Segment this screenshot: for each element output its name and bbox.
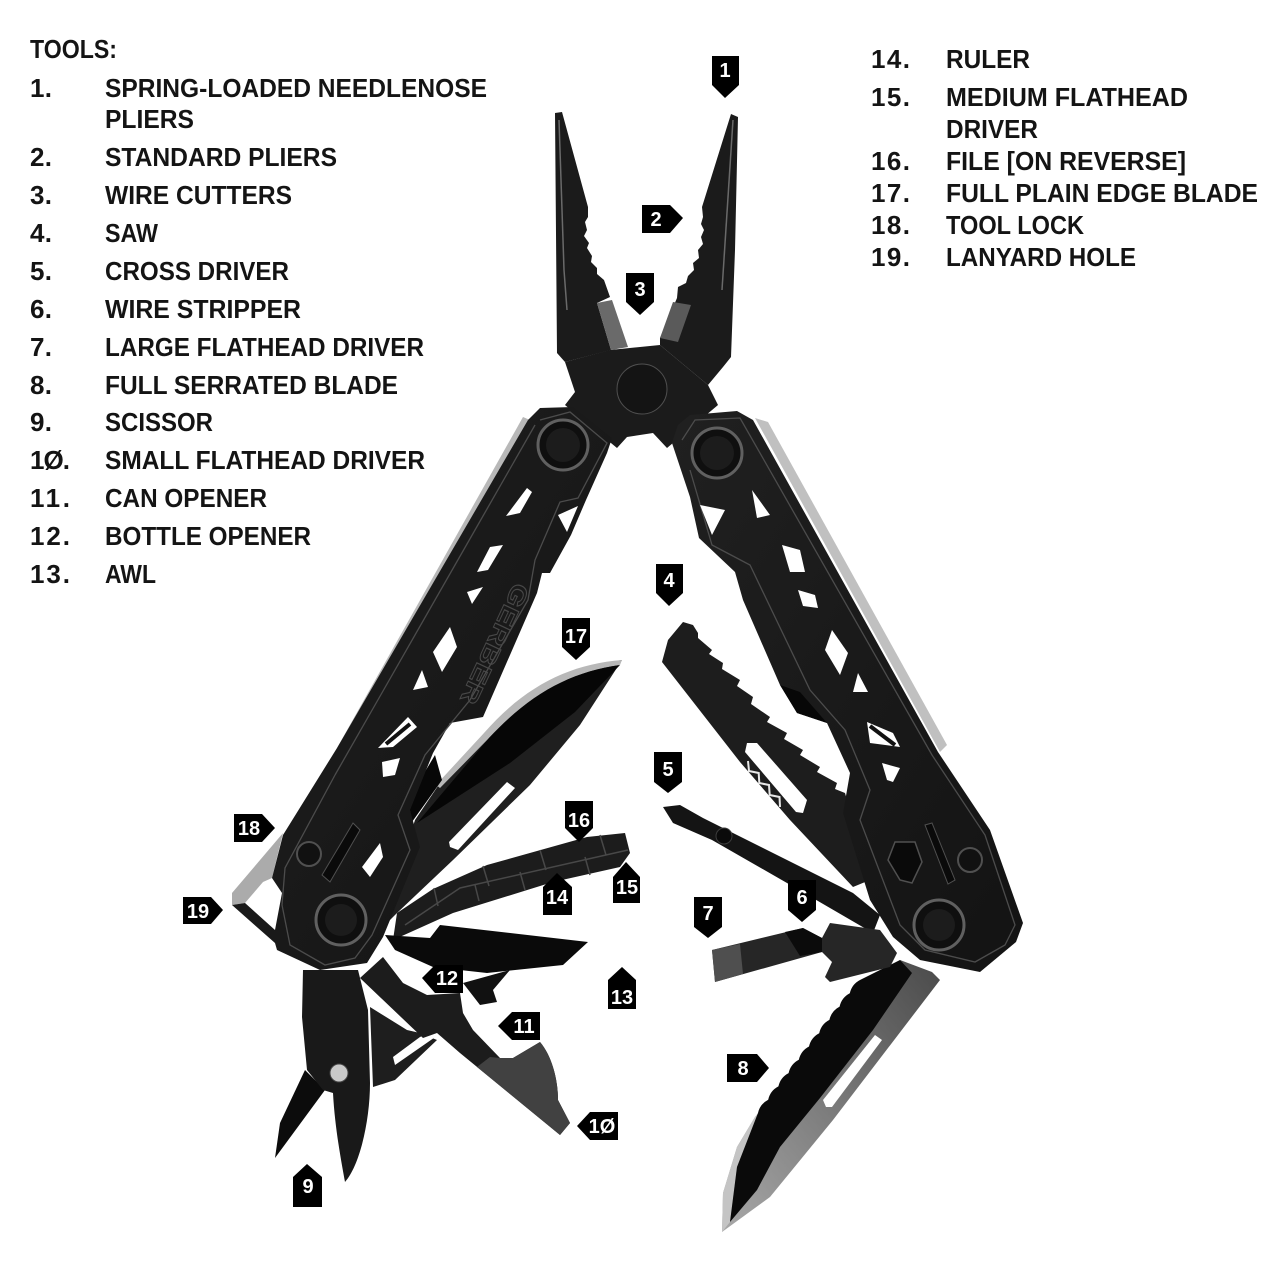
tools list, left column: 3. [30, 180, 52, 210]
right handle [672, 411, 1023, 972]
tools list, right column: 17. [871, 178, 910, 208]
tools list, left column: 13. [30, 559, 70, 589]
tag 5 [654, 752, 682, 793]
tool: full plain edge blade [380, 660, 622, 930]
tools list, right column: 15. [871, 82, 910, 112]
tools list, left column: SPRING-LOADED NEEDLENOSE [105, 73, 487, 103]
tool: full serrated blade [722, 960, 940, 1232]
tools list, right column: LANYARD HOLE [946, 242, 1136, 272]
tools list, left column: 9. [30, 407, 52, 437]
tag 14 [543, 873, 572, 915]
tag 15: 15 [616, 877, 638, 899]
tools list, right column: FILE [ON REVERSE] [946, 146, 1186, 176]
screw: upper pivot [692, 428, 742, 478]
tag 7: 7 [702, 903, 714, 925]
tag 17 [562, 618, 590, 660]
tag 11: 11 [513, 1016, 535, 1038]
tool: large flathead driver and wire stripper [712, 923, 897, 982]
hex recess [888, 842, 922, 883]
window cut-outs [362, 488, 578, 877]
tool: can opener and flathead drivers [360, 957, 570, 1135]
tag 1: 1 [719, 60, 731, 82]
tools list, left column: STANDARD PLIERS [105, 142, 337, 172]
tag 14: 14 [546, 887, 569, 909]
list heading: TOOLS: [30, 34, 117, 64]
tools list, left column: 8. [30, 370, 52, 400]
tools list, left column: CAN OPENER [105, 483, 267, 513]
tools list, left column: PLIERS [105, 104, 194, 134]
tag 10 [577, 1112, 618, 1140]
tag 9 [293, 1164, 322, 1207]
tag 12: 12 [436, 968, 458, 990]
tools list, right column: RULER [946, 44, 1030, 74]
tools list, left column: SMALL FLATHEAD DRIVER [105, 445, 425, 475]
tools list, left column: SCISSOR [105, 407, 213, 437]
tag 8: 8 [737, 1058, 749, 1080]
tag 7 [694, 897, 722, 938]
tools list, left column: 1Ø. [30, 445, 70, 475]
tag 13 [608, 967, 636, 1009]
multi-tool illustration [232, 112, 1023, 1232]
tag 15 [613, 862, 640, 903]
tools list, left column: WIRE STRIPPER [105, 294, 301, 324]
wire cutters [597, 300, 691, 350]
tools list, right column: 16. [871, 146, 910, 176]
tag 18 [234, 814, 275, 842]
screw: lower pivot [914, 900, 964, 950]
tag 19: 19 [187, 901, 209, 923]
tool: cross driver [663, 805, 880, 933]
screw: lower pivot [316, 895, 366, 945]
tag 3: 3 [634, 279, 646, 301]
tools list, right column: MEDIUM FLATHEAD [946, 82, 1188, 112]
tools list, right column: DRIVER [946, 114, 1038, 144]
tag 2: 2 [650, 209, 662, 231]
tag 18: 18 [238, 818, 260, 840]
tag 11 [498, 1012, 540, 1040]
tag 10: 1Ø [589, 1116, 615, 1138]
tag 5: 5 [662, 759, 674, 781]
tools list, left column: AWL [105, 559, 156, 589]
tools list, right column: 14. [871, 44, 910, 74]
tag 12 [422, 965, 463, 993]
tool: ruler and medium flathead driver [393, 833, 630, 940]
tools list, left column: FULL SERRATED BLADE [105, 370, 398, 400]
tools list, right column: 19. [871, 242, 910, 272]
tools list, left column: 6. [30, 294, 52, 324]
left handle [232, 407, 612, 970]
tools list, left column: 5. [30, 256, 52, 286]
tag 13: 13 [611, 987, 633, 1009]
tool: spring-loaded needlenose pliers [555, 112, 738, 448]
tool: small blade below ruler [385, 925, 588, 973]
tag 1 [712, 56, 739, 98]
tag 6: 6 [796, 887, 808, 909]
tools list, left column: 11. [30, 483, 70, 513]
tag 2 [642, 205, 683, 233]
tools list, right column [871, 44, 1258, 272]
tools list, left column: 12. [30, 521, 70, 551]
tools list, left column: BOTTLE OPENER [105, 521, 311, 551]
tag 8 [727, 1054, 769, 1082]
tools list, right column: FULL PLAIN EDGE BLADE [946, 178, 1258, 208]
tools list, left column: 7. [30, 332, 52, 362]
tag 3 [626, 273, 654, 315]
tag 16: 16 [568, 810, 590, 832]
tag 19 [183, 897, 223, 924]
tag 4 [656, 564, 683, 606]
tools list, left column: 4. [30, 218, 52, 248]
tag 6 [788, 880, 816, 922]
logo: GERBER [454, 579, 534, 708]
tag 17: 17 [565, 626, 587, 648]
tag 9: 9 [302, 1176, 314, 1198]
tools list, left column: LARGE FLATHEAD DRIVER [105, 332, 424, 362]
window cut-outs [700, 490, 900, 782]
tools list, left column: 1. [30, 73, 52, 103]
tools list, left column: WIRE CUTTERS [105, 180, 292, 210]
tag 4: 4 [663, 570, 675, 592]
tools list, left column: SAW [105, 218, 158, 248]
tools list, left column: CROSS DRIVER [105, 256, 289, 286]
tools list, right column: TOOL LOCK [946, 210, 1084, 240]
screw: upper pivot [538, 420, 588, 470]
tag 16 [565, 801, 593, 842]
tools list, left column [30, 34, 487, 589]
tool: saw [662, 622, 870, 887]
callout tags [183, 56, 816, 1207]
tools list, right column: 18. [871, 210, 910, 240]
tool: scissor [275, 970, 370, 1182]
tools list, left column: 2. [30, 142, 52, 172]
